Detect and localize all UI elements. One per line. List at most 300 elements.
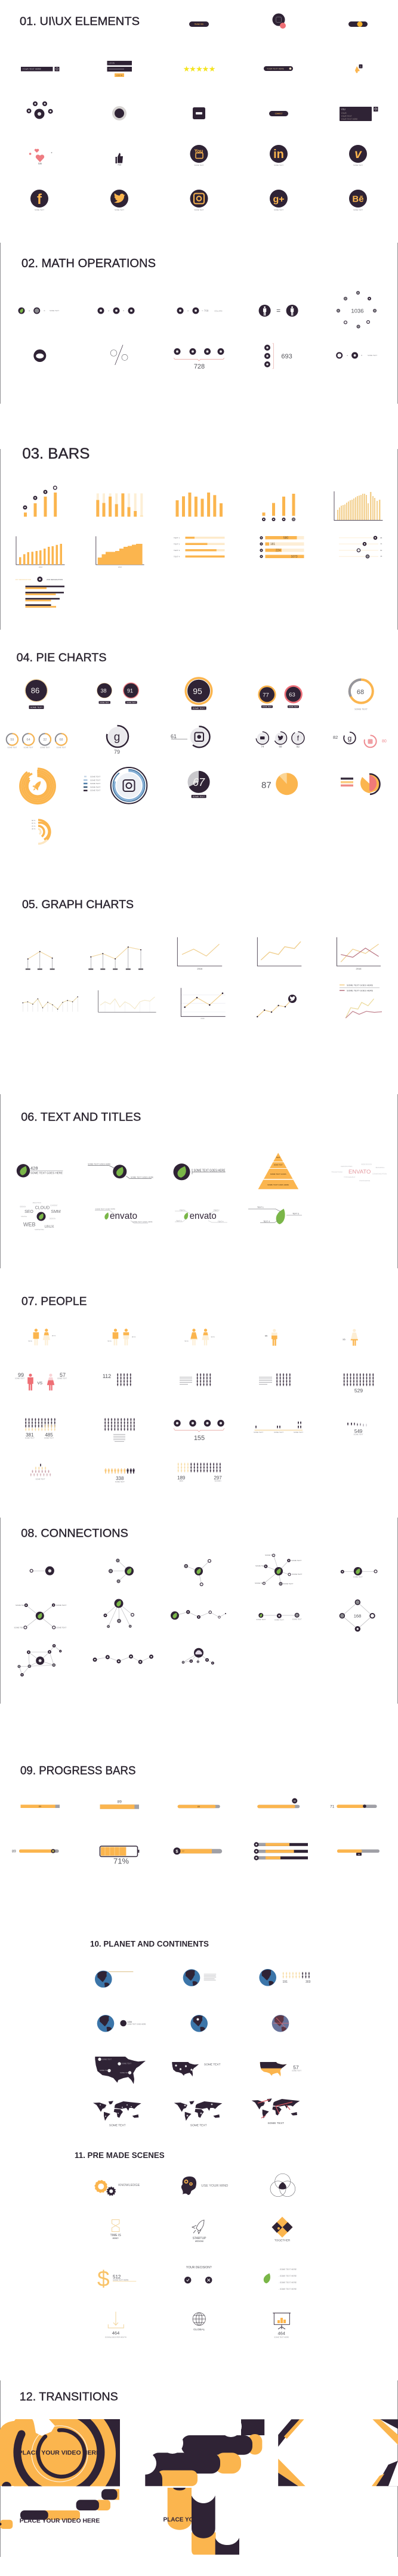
progress bar: 89 knob bbox=[12, 1849, 59, 1853]
people row: 338 bbox=[104, 1468, 135, 1483]
search input bbox=[21, 67, 60, 72]
pyramid bbox=[257, 1153, 300, 1189]
word cloud: envato: TRANSITIONS bbox=[331, 1171, 343, 1174]
people pair: orange 3: 30 % bbox=[211, 1336, 215, 1338]
scene: startup rocket: STARTUP bbox=[193, 2237, 206, 2240]
line chart with twitter badge bbox=[257, 995, 297, 1017]
vertical sum: 693: 693 bbox=[281, 353, 292, 360]
connection: zigzag chain bbox=[93, 1654, 153, 1664]
scene: your decision bbox=[184, 2266, 212, 2283]
pie: 77 and 63: SOME TEXT bbox=[262, 705, 272, 708]
sum bracket: 155 bbox=[174, 1420, 224, 1442]
connection: leaf six labelled: SOME TEXT bbox=[283, 1583, 293, 1585]
battery progress: 71 bbox=[100, 1846, 139, 1865]
globe with people: 191 bbox=[283, 1980, 288, 1984]
four ring charts: 59 bbox=[10, 738, 14, 742]
icon: behance bbox=[349, 190, 367, 211]
star rating: ★ bbox=[189, 64, 196, 73]
progress bar: rounded value: 89 bbox=[198, 1805, 200, 1808]
scene: dollars 512: 512 bbox=[113, 2274, 121, 2280]
section 01: UI UX elements bbox=[20, 13, 378, 211]
horizontal bar chart: TEXT 3 bbox=[174, 549, 180, 552]
scene: downloads 464 bbox=[105, 2312, 127, 2339]
icon: facebook bbox=[30, 190, 48, 211]
map: usa with pins: SOME TEXT bbox=[120, 2072, 129, 2074]
connection: leaf two sides bbox=[341, 1567, 377, 1578]
word cloud: envato: ENVATO bbox=[348, 1169, 371, 1175]
star rating: ★ bbox=[196, 64, 203, 73]
pie: 86 bbox=[24, 679, 48, 709]
horizontal bars with icons: 580 bbox=[283, 537, 288, 540]
line chart with legend: SOME TEXT GOES HERE bbox=[347, 990, 374, 992]
progress bar: dollar bbox=[173, 1847, 222, 1854]
horizontal bar chart bbox=[174, 537, 224, 558]
slider bars: 98 bbox=[380, 537, 382, 539]
three social rings: f bbox=[297, 734, 300, 742]
connection: leaf six labelled bbox=[255, 1554, 302, 1586]
line chart with legend bbox=[340, 984, 382, 1018]
scene: together puzzle bbox=[272, 2217, 292, 2242]
progress bar: value above bbox=[100, 1800, 139, 1809]
hearts likes bbox=[29, 149, 52, 165]
login form: LOGIN bbox=[109, 62, 115, 64]
icon: google plus bbox=[270, 190, 288, 211]
transition: vertical strips: PLACE YOUR bbox=[163, 2516, 203, 2523]
word cloud: envato: COMMUNICATION bbox=[372, 1172, 387, 1175]
section 03: bars bbox=[16, 445, 382, 608]
search results panel: YOUR bbox=[341, 112, 347, 114]
four ring charts: 32 bbox=[43, 738, 47, 742]
progress bar: value above: 89 bbox=[118, 1800, 122, 1804]
map: usa small bbox=[172, 2062, 221, 2076]
people grid with text left 2 bbox=[259, 1373, 291, 1386]
word cloud: web: CLOUD bbox=[35, 1206, 50, 1210]
logo leaf with text lines bbox=[248, 1206, 302, 1224]
section 11: pre made scenes bbox=[75, 2150, 297, 2339]
people grid with text left bbox=[180, 1373, 212, 1386]
people grid: 529 bbox=[343, 1373, 375, 1394]
equation: search plus twitter bbox=[98, 308, 135, 314]
connection: diamond 168: 168 bbox=[354, 1614, 361, 1618]
people pair: orange 2 bbox=[107, 1329, 136, 1345]
icon: youtube: You bbox=[195, 148, 203, 154]
connection: two nodes bbox=[30, 1566, 54, 1575]
word cloud: envato: BRANDING bbox=[376, 1166, 384, 1169]
progress bar: rounded value bbox=[178, 1805, 220, 1808]
search input: YOUR TEXT HERE bbox=[23, 68, 42, 70]
scene: time is money: MONEY bbox=[113, 2237, 119, 2240]
line chart with axes 2016 bbox=[177, 937, 222, 970]
icon: vimeo: v bbox=[354, 147, 362, 161]
icon: bell with badge: 1 bbox=[360, 66, 362, 68]
search results panel: YOUR TEXT HERE bbox=[341, 118, 357, 120]
logo: envato with four callouts: TEXT 2 bbox=[214, 1209, 220, 1212]
progress bar: 89 knob: 89 bbox=[12, 1850, 16, 1853]
connection: leaf two sides: SOME TEXT bbox=[353, 1575, 363, 1578]
map: usa with pins: SOME TEXT bbox=[122, 2062, 131, 2064]
equation: search plus twitter: = bbox=[123, 309, 125, 312]
logo: envato with two callouts bbox=[95, 1208, 153, 1223]
scene: time is money: TIME IS bbox=[110, 2234, 121, 2237]
equation: dollars: = 709 bbox=[202, 309, 209, 312]
pie: 87: 87 bbox=[261, 781, 271, 791]
heading: 11: 11. PRE MADE SCENES bbox=[75, 2150, 165, 2160]
horizontal bar chart: TEXT 4 bbox=[174, 556, 180, 558]
ring chart: 68 bbox=[345, 676, 377, 711]
icon: behance: Bē bbox=[352, 194, 364, 204]
people grid: 112: 112 bbox=[103, 1373, 111, 1379]
glowing circle button bbox=[112, 106, 127, 120]
icon: youtube bbox=[190, 145, 208, 166]
equation: some text: SOME TEXT bbox=[368, 354, 377, 357]
people pair: orange 1: 30 % bbox=[52, 1335, 56, 1337]
people pair: orange 1: 50 % bbox=[28, 1340, 32, 1342]
battery progress: 71: 71% bbox=[113, 1857, 129, 1865]
section 08: connections bbox=[14, 1527, 377, 1677]
people pyramid bbox=[29, 1463, 52, 1480]
globe with pin bbox=[190, 2015, 208, 2032]
map: world pins 2: SOME TEXT bbox=[190, 2124, 207, 2128]
logo: envato with four callouts: TEXT 3 bbox=[176, 1220, 182, 1222]
slider bars: 78 bbox=[380, 555, 382, 558]
bar chart eight bars bbox=[175, 493, 223, 516]
logo: envato with two callouts: SOME TEXT GOES HERE bbox=[132, 1221, 153, 1223]
search results panel: YOUR TEXT bbox=[341, 115, 352, 117]
man vs woman: pink: VS bbox=[37, 1381, 43, 1386]
icon: bell with badge bbox=[355, 64, 363, 73]
title: logo with rule: SOME TEXT GOES HERE bbox=[193, 1169, 226, 1172]
four ring charts: SOME TEXT bbox=[7, 747, 17, 749]
man vs woman: pink bbox=[15, 1372, 67, 1391]
ring chart: 68: 68 bbox=[357, 689, 364, 696]
instagram layered ring with legend bbox=[84, 767, 147, 804]
instagram layered ring with legend: SOME TEXT bbox=[90, 782, 100, 785]
scene: leaf list: - SOME TEXT HERE bbox=[279, 2288, 297, 2290]
three social rings bbox=[256, 732, 304, 748]
pie: 86: 86 bbox=[31, 686, 39, 695]
bar chart with icons bbox=[23, 485, 57, 516]
connection: leaf three around bbox=[184, 1559, 211, 1586]
icon: behance: SOME TEXT bbox=[353, 209, 363, 211]
sum bracket: 155: 155 bbox=[194, 1435, 205, 1442]
icon: linkedin: in bbox=[273, 148, 284, 161]
map: usa with pins: SOME TEXT bbox=[100, 2069, 109, 2072]
pie: 38 and 91 bbox=[97, 682, 139, 704]
equation: search plus twitter: + bbox=[108, 309, 110, 312]
word cloud: web: UI\UX bbox=[44, 1225, 54, 1229]
three social rings: 74 bbox=[261, 745, 264, 748]
logo: envato with four callouts bbox=[175, 1209, 227, 1222]
progress bar: tag below bbox=[337, 1850, 380, 1856]
stepped area chart bbox=[96, 536, 144, 568]
scene: startup rocket bbox=[192, 2220, 206, 2242]
globe with stat badge bbox=[97, 2015, 146, 2032]
scene: knowledge gears bbox=[95, 2181, 140, 2196]
connection: leaf four corners: SOME TEXT bbox=[14, 1627, 24, 1629]
rounded search bbox=[264, 66, 293, 71]
map: usa with pins: SOME TEXT bbox=[102, 2058, 112, 2061]
section 09: progress bars bbox=[12, 1765, 380, 1865]
globe with pink highlight bbox=[272, 2015, 289, 2032]
search results panel bbox=[340, 107, 378, 121]
star rating: ★ bbox=[202, 64, 209, 73]
word cloud: web: ANALYTICS bbox=[33, 1202, 41, 1204]
icon: google plus: SOME TEXT bbox=[274, 209, 283, 211]
connection: three in line: SOME TEXT bbox=[256, 1618, 266, 1621]
dense bar chart with axes bbox=[334, 491, 382, 521]
transition: strips with text bbox=[0, 2489, 119, 2529]
button: thank you bbox=[189, 21, 209, 27]
equation: leaf plus icon: SOME TEXT bbox=[50, 309, 59, 312]
progress bar: 71 knob: 71 bbox=[330, 1804, 335, 1809]
icon: facebook: SOME TEXT bbox=[35, 209, 44, 211]
ring: instagram 61 bbox=[171, 726, 210, 747]
pie: 67 bbox=[187, 771, 210, 798]
horizontal bars with icons: 224 bbox=[276, 549, 280, 553]
icon: instagram bbox=[190, 190, 208, 211]
heading: 07: 07. PEOPLE bbox=[21, 1295, 87, 1308]
people grid: 112 bbox=[103, 1373, 132, 1386]
progress bar: inline value bbox=[20, 1804, 60, 1808]
globe with stat badge: 1456 bbox=[127, 2021, 132, 2023]
pie: 67: SOME TEXT bbox=[193, 795, 205, 798]
scene: leaf list: - SOME TEXT HERE bbox=[279, 2275, 297, 2277]
logo: envato with four callouts: TEXT 1 bbox=[180, 1209, 186, 1212]
people pair: orange 3: 50 % bbox=[184, 1340, 189, 1342]
login form: LOG IN bbox=[116, 74, 122, 76]
button: thank you: THANK YOU bbox=[195, 23, 203, 25]
pyramid: TEXT bbox=[276, 1156, 280, 1159]
transition: x shape bbox=[278, 2419, 398, 2486]
progress bar: badge above bbox=[257, 1798, 300, 1808]
connection: cloud with children bbox=[182, 1648, 214, 1665]
transition: vertical strips bbox=[163, 2488, 239, 2555]
people row: 338: SOME TEXT bbox=[115, 1481, 125, 1483]
people grid: 189 and 297: 297 bbox=[214, 1475, 222, 1481]
section 05: graph charts bbox=[22, 899, 382, 1020]
pie: 86: SOME TEXT bbox=[30, 706, 43, 708]
horizontal bars with icons: 1073 bbox=[291, 555, 298, 559]
progress bar: tag below: 64 bbox=[358, 1853, 360, 1856]
connection: leaf three left bbox=[109, 1559, 134, 1583]
word cloud: web: DESIGN bbox=[50, 1218, 55, 1220]
transition: circular wipe: PLACE YOUR VIDEO HERE bbox=[18, 2450, 100, 2457]
map: usa percent bbox=[260, 2062, 301, 2076]
section 06: text and titles bbox=[17, 1111, 387, 1231]
three social rings: 92 bbox=[297, 745, 300, 748]
connection: leaf six labelled: SOME TEXT bbox=[265, 1554, 275, 1556]
horizontal bars with icons bbox=[260, 536, 304, 559]
people grid: 189 and 297: 189 bbox=[177, 1475, 186, 1481]
globe with people bbox=[259, 1969, 311, 1986]
globe with line bbox=[95, 1971, 133, 1987]
map: usa percent: SOME TEXT bbox=[292, 2069, 301, 2072]
toggle bbox=[348, 21, 368, 27]
rings: 82 and 80: g bbox=[348, 734, 351, 742]
scene: presentation board bbox=[273, 2313, 291, 2339]
pie: 38 and 91: 38 bbox=[100, 688, 107, 694]
ring chart: 68: SOME TEXT bbox=[354, 708, 368, 711]
word cloud: envato bbox=[331, 1163, 387, 1182]
logo: envato with two callouts: SOME TEXT GOES HERE bbox=[95, 1208, 115, 1210]
line chart with gridlines bbox=[181, 988, 226, 1020]
scene: downloads 464: 464 bbox=[112, 2330, 119, 2336]
horizontal bars with icons: 181 bbox=[270, 543, 275, 546]
person: woman percent bbox=[343, 1329, 358, 1346]
scene: startup rocket: WEEKEND bbox=[195, 2240, 203, 2242]
progress bar: dollar: 77 bbox=[181, 1850, 185, 1853]
word cloud: web: MARKETING bbox=[35, 1228, 44, 1231]
logo leaf with text lines: TEXT 3 bbox=[292, 1213, 299, 1215]
scene: global bbox=[193, 2312, 205, 2332]
double bar comparison: 2ND DESIGNATION bbox=[47, 578, 63, 581]
square app icon bbox=[193, 107, 205, 119]
connection: network bbox=[18, 1644, 61, 1677]
scene: knowledge gears: KNOWLEDGE bbox=[118, 2184, 140, 2187]
heading: 08: 08. CONNECTIONS bbox=[21, 1527, 128, 1540]
line chart: five points bbox=[88, 946, 143, 970]
line chart with gridlines: 2016 bbox=[200, 1017, 205, 1020]
bar chart with axis rising bbox=[16, 536, 64, 568]
scene: dollars 512: $ bbox=[97, 2267, 110, 2291]
rings: 82 and 80: 80 bbox=[382, 739, 387, 744]
pie: 38 and 91: SOME TEXT bbox=[100, 701, 110, 704]
scene: downloads 464: DOWNLOADS PER MONTH bbox=[105, 2336, 127, 2339]
transition: stepped blocks bbox=[134, 2416, 264, 2486]
sum bracket: 728 bbox=[174, 348, 224, 370]
connection: leaf tree down bbox=[104, 1599, 134, 1628]
people pair: orange 2: 30 % bbox=[132, 1336, 136, 1338]
globe with people: 303 bbox=[306, 1980, 311, 1984]
word cloud: web: WEB bbox=[23, 1221, 36, 1227]
title: 428 with logo: 428 bbox=[30, 1165, 38, 1171]
connection: leaf four corners: SOME TEXT bbox=[16, 1604, 26, 1606]
icon: google plus: g+ bbox=[273, 194, 285, 205]
instagram layered ring with legend: SOME TEXT bbox=[90, 779, 100, 781]
connection: leaf four corners: SOME TEXT bbox=[56, 1627, 66, 1629]
word cloud: web: DESIGN bbox=[20, 1206, 26, 1208]
equation: leaf plus icon: = bbox=[44, 309, 45, 312]
heading: 03: 03. BARS bbox=[22, 445, 90, 462]
word cloud: web: SMM bbox=[51, 1210, 61, 1214]
stepped area chart: 2016 bbox=[118, 566, 122, 568]
half ring chart: 60 % bbox=[32, 822, 36, 825]
pale line chart with axes bbox=[98, 990, 156, 1012]
word cloud: web bbox=[20, 1202, 61, 1231]
connection: leaf four corners: SOME TEXT bbox=[56, 1604, 66, 1606]
circle of icons: 1036: 1036 bbox=[351, 308, 364, 315]
pie: 95 bbox=[185, 677, 212, 710]
equation: dollars: + bbox=[187, 309, 189, 312]
equation: some text bbox=[336, 352, 377, 359]
section 10: planet and continents bbox=[90, 1939, 311, 2128]
pie: 38 and 91: SOME TEXT bbox=[127, 701, 136, 704]
progress bars: triple bbox=[254, 1842, 308, 1860]
logo leaf with text lines: TEXT 4 bbox=[263, 1220, 270, 1222]
equation: people bbox=[259, 305, 298, 317]
title: callout logo bbox=[88, 1163, 153, 1178]
four ring charts: SOME TEXT bbox=[40, 747, 50, 749]
progress bar: dollar: $ bbox=[175, 1849, 178, 1854]
slider bars bbox=[339, 536, 382, 558]
man vs woman: pink: SOME TEXT bbox=[15, 1377, 24, 1380]
icon: twitter: SOME TEXT bbox=[115, 209, 124, 211]
vertical sum: 693 bbox=[264, 343, 292, 369]
four ring charts: 68 bbox=[59, 738, 63, 742]
heading: 04: 04. PIE CHARTS bbox=[17, 652, 107, 664]
scene: use your mind bbox=[181, 2176, 229, 2195]
two line chart bbox=[337, 937, 381, 970]
star rating bbox=[183, 64, 215, 73]
word cloud: envato: TYPOGRAPHY bbox=[344, 1176, 356, 1178]
people timeline: SOME TEXT bbox=[274, 1431, 283, 1433]
horizontal bar chart: TEXT 1 bbox=[174, 537, 180, 539]
two line chart: 2016 bbox=[356, 967, 362, 970]
people grid with text below bbox=[104, 1418, 136, 1442]
globe with text bbox=[183, 1969, 216, 1986]
connection: leaf six labelled: SOME TEXT bbox=[255, 1582, 265, 1584]
scene: global: GLOBAL bbox=[193, 2328, 205, 2332]
progress bar: badge above: 89 bbox=[294, 1800, 296, 1802]
section 12: transitions bbox=[0, 2391, 398, 2555]
title: 428 with logo bbox=[17, 1164, 63, 1177]
heading: 02: 02. MATH OPERATIONS bbox=[21, 257, 156, 270]
ring: google plus 79 bbox=[107, 726, 128, 755]
map: world pins 1 bbox=[93, 2101, 141, 2128]
connection: three in line: SOME TEXT bbox=[292, 1618, 302, 1621]
people grid: 381 and 485: SOME TEXT bbox=[25, 1437, 35, 1439]
scene: dollars 512: SOME TEXT HERE bbox=[113, 2279, 128, 2281]
thumbs up bbox=[116, 153, 123, 166]
people grid: 529: 529 bbox=[354, 1388, 363, 1394]
people row: 338: 338 bbox=[116, 1476, 124, 1481]
pie: 77 and 63: 63 bbox=[289, 692, 295, 698]
instagram layered ring with legend: SOME TEXT bbox=[90, 789, 100, 792]
icon: vimeo bbox=[349, 145, 367, 166]
icon: piggy bank bbox=[33, 349, 46, 362]
logo: envato with two callouts: envato bbox=[110, 1211, 137, 1221]
concentric rocket chart bbox=[20, 769, 55, 804]
equation: leaf plus icon bbox=[18, 308, 59, 314]
pie: 95: 95 bbox=[193, 686, 202, 696]
equation: some text: + bbox=[347, 354, 348, 357]
people timeline: SOME TEXT bbox=[254, 1431, 263, 1433]
instagram layered ring with legend: SOME TEXT bbox=[90, 786, 100, 788]
person: man percent: 95 bbox=[265, 1335, 268, 1337]
rising line chart bbox=[257, 937, 301, 966]
progress bar: 71 knob bbox=[330, 1804, 377, 1809]
bar chart with axis rising: 2016 bbox=[39, 566, 43, 568]
progress bar: inline value: 89 bbox=[39, 1805, 42, 1808]
word cloud: envato: WEB DESIGN bbox=[361, 1163, 372, 1165]
person: woman percent: 95 bbox=[343, 1338, 345, 1340]
title: callout logo: SOME TEXT GOES HERE bbox=[88, 1163, 110, 1165]
half ring chart: 25 % bbox=[32, 825, 36, 827]
word cloud: web: SEO bbox=[24, 1210, 33, 1214]
people grid: 381 and 485 bbox=[24, 1418, 56, 1439]
half ring chart: 46 % bbox=[32, 828, 36, 830]
thumbs up: 723 bbox=[118, 163, 121, 166]
sum bracket: 728: 728 bbox=[194, 363, 205, 370]
search results panel: YOU bbox=[341, 109, 345, 111]
logo: envato with four callouts: envato bbox=[190, 1211, 217, 1221]
globe with stat badge: SOME TEXT GOES HERE bbox=[127, 2023, 146, 2025]
people row: 549: SOME TEXT bbox=[354, 1433, 363, 1436]
equation: people: = bbox=[276, 306, 280, 315]
equation: dollars: DOLLARS bbox=[214, 310, 223, 312]
map: world pink routes bbox=[252, 2098, 300, 2125]
star rating: ★ bbox=[183, 64, 190, 73]
